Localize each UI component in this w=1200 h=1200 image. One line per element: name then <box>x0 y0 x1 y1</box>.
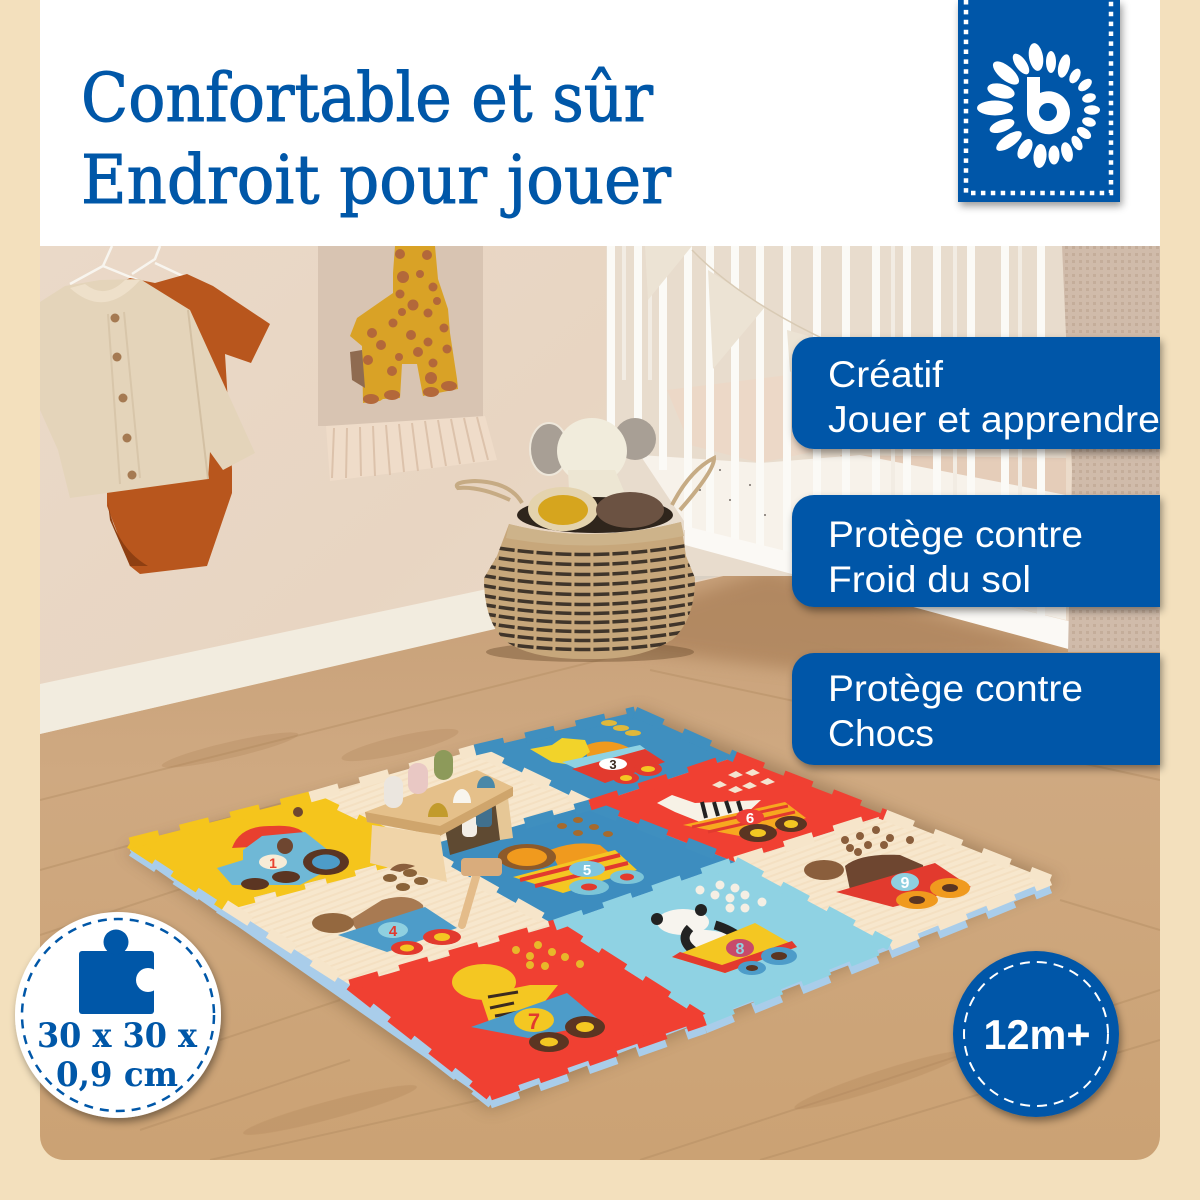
orange bodysuit <box>97 274 270 574</box>
toy interior and pegs under bench <box>443 800 500 855</box>
icon: puzzle piece <box>79 930 160 1014</box>
tile 8 art: panda cart: 8 <box>736 941 745 958</box>
shadow of mat <box>125 710 1060 1110</box>
tile 6 art: zebra cart <box>657 769 807 842</box>
tile 7 art: tiger cart <box>452 941 605 1052</box>
callout: chocs: Chocs <box>828 712 934 754</box>
tile 4 art: rhino cart <box>312 897 461 955</box>
callout: chocs <box>792 653 1160 765</box>
header panel <box>40 0 1160 246</box>
puzzle play mat <box>130 712 1050 1103</box>
callout: froid du sol: Froid du sol <box>828 558 1031 600</box>
size badge <box>15 912 221 1118</box>
floor planks <box>40 640 1160 1160</box>
callout: créatif <box>792 337 1160 449</box>
tile 3 art: elephant cart <box>530 720 665 784</box>
basket with plush toys <box>457 418 714 662</box>
crib bottom rail <box>685 526 1072 650</box>
callout: chocs: Protège contre <box>828 667 1083 709</box>
mat foam base <box>130 720 1050 1103</box>
floor <box>40 566 1160 1160</box>
crib pillow <box>667 372 812 463</box>
interlocking teeth <box>130 712 1050 1095</box>
bunting <box>648 246 791 372</box>
title: Endroit pour jouer <box>81 141 671 219</box>
tile 1 art: monkey train <box>217 807 349 890</box>
tile 8 art: panda cart <box>651 880 797 975</box>
age badge: 12m+ <box>953 951 1119 1117</box>
title <box>81 59 671 219</box>
pegs <box>384 750 495 817</box>
bench top <box>365 770 513 833</box>
crib <box>606 246 1072 650</box>
callout: froid du sol <box>792 495 1160 607</box>
age badge: 12m+: 12m+ <box>984 1011 1090 1058</box>
size badge: 0,9 cm <box>56 1055 178 1095</box>
crib slats <box>611 246 1041 616</box>
hangers <box>70 246 187 284</box>
tile 5 art: lion cart <box>498 817 644 895</box>
tile 4 art: rhino cart: 4 <box>389 923 398 940</box>
basket interior <box>517 497 673 533</box>
photo: nursery scene <box>40 246 1160 1160</box>
crib sheet <box>840 455 1066 495</box>
tile 9 art: hippo cart <box>804 826 971 909</box>
basket body <box>484 522 695 659</box>
tile 9 art: hippo cart: 9 <box>901 875 910 892</box>
basket handles <box>457 458 714 510</box>
logo: brand tag <box>958 0 1120 202</box>
tile 3 art: elephant cart: 3 <box>609 757 617 772</box>
floor shade beneath crib <box>653 576 1056 673</box>
tile 6 art: zebra cart: 6 <box>746 810 754 827</box>
callout: froid du sol: Protège contre <box>828 513 1083 555</box>
mat tiles <box>130 712 1050 1095</box>
giraffe wall hanging <box>318 246 497 481</box>
callout: créatif: Jouer et apprendre <box>828 398 1160 440</box>
tile 5 art: lion cart: 5 <box>583 862 591 879</box>
tile 1 art: monkey train: 1 <box>269 855 277 871</box>
hammer <box>462 870 478 925</box>
elephant plush <box>529 418 656 497</box>
lion plush <box>528 487 598 531</box>
baseboard <box>40 589 495 734</box>
beige cardigan <box>40 279 255 498</box>
second leg <box>495 798 513 840</box>
front leg <box>370 825 447 882</box>
crib mattress <box>640 455 1066 620</box>
size badge: 30 x 30 x <box>37 1016 198 1056</box>
wooden hammer toy <box>365 750 513 925</box>
callout: créatif: Créatif <box>828 353 944 395</box>
blanket <box>1062 246 1160 652</box>
title: Confortable et sûr <box>81 59 653 137</box>
clothes on hangers <box>40 246 270 574</box>
tile 7 art: tiger cart: 7 <box>528 1009 540 1034</box>
wall <box>40 246 1072 684</box>
small plush <box>596 492 664 528</box>
